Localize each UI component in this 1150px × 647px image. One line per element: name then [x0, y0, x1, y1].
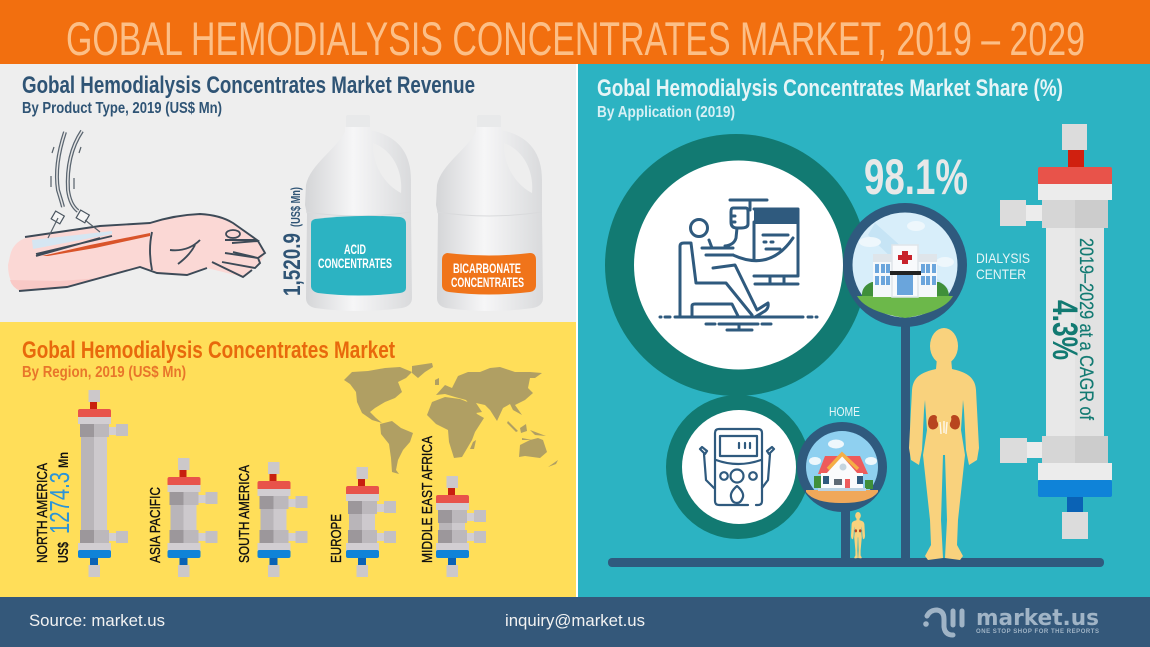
- dialyzer: North America: [78, 390, 128, 577]
- figure: small human body: [851, 512, 865, 558]
- logo: market.us: [923, 606, 1099, 635]
- text: CAGR period: 2019–2029 at a CAGR of: [1075, 238, 1096, 421]
- label: South America: SOUTH AMERICA: [236, 465, 253, 563]
- label: dialysis center: DIALYSIS: [976, 250, 1030, 266]
- label: North America value: 1274.3: [44, 472, 75, 534]
- circle: dialysis patient: [605, 134, 867, 396]
- panel: market by region: [0, 322, 576, 597]
- icon: patient on dialysis: [660, 200, 817, 330]
- label: Middle East Africa: MIDDLE EAST AFRICA: [419, 436, 436, 563]
- source text: Source: market.us: [29, 611, 165, 630]
- bottle: acid concentrates: ACID: [344, 242, 366, 257]
- bottle: bicarbonate concentrates: BICARBONATE: [453, 261, 521, 276]
- panel: revenue by product type: [0, 64, 576, 322]
- bottle: bicarbonate concentrates: [436, 115, 543, 311]
- label: North America value: US$: [55, 542, 72, 563]
- footer bar: [0, 597, 1150, 647]
- value: CAGR: 4.3%: [1045, 300, 1084, 360]
- subheading: product type: By Product Type, 2019 (US$ Mn): [22, 100, 222, 117]
- contact email: inquiry@market.us: [505, 611, 645, 630]
- circle: dialysis center hospital: [843, 203, 967, 327]
- label: North America: NORTH AMERICA: [34, 463, 51, 563]
- bottle: bicarbonate concentrates: CONCENTRATES: [451, 275, 524, 290]
- subheading: region: By Region, 2019 (US$ Mn): [22, 364, 186, 381]
- logo: market.us: market.us: [976, 606, 1099, 631]
- unit: US$ Mn: (US$ Mn): [288, 187, 303, 227]
- world map: [344, 363, 558, 474]
- illustration: forearm with dialysis tubes: [8, 131, 265, 291]
- figure: large human body with kidneys: [909, 328, 979, 560]
- heading: revenue: Gobal Hemodialysis Concentrates Market Revenue: [22, 72, 475, 99]
- dialyzer: South America: [258, 462, 308, 577]
- panel: market share by application: [578, 64, 1150, 597]
- circle: home dialysis machine: [666, 395, 810, 539]
- label: home: HOME: [829, 404, 860, 419]
- circle: home house: [797, 422, 887, 512]
- subheading: application: By Application (2019): [597, 104, 735, 121]
- label: Asia Pacific: ASIA PACIFIC: [147, 487, 164, 563]
- icon: dialysis machine: [700, 429, 774, 505]
- label: dialysis center: CENTER: [976, 266, 1026, 282]
- dialyzer: Middle East Africa: [436, 476, 486, 577]
- logo: market.us: ONE STOP SHOP FOR THE REPORTS: [976, 629, 1099, 635]
- heading: region: Gobal Hemodialysis Concentrates Market: [22, 337, 395, 364]
- label: dialysis center: [976, 250, 1030, 282]
- label: Europe: EUROPE: [328, 514, 345, 563]
- label: North America value: Mn: [55, 452, 71, 468]
- value: acid concentrates revenue: 1,520.9: [279, 233, 306, 296]
- value: 98.1%: 98.1%: [864, 149, 968, 205]
- dialyzer: Europe: [346, 467, 396, 577]
- base and stems: [608, 320, 1104, 567]
- bottle: acid concentrates: CONCENTRATES: [318, 256, 392, 271]
- bottle: acid concentrates: [305, 115, 412, 311]
- dialyzer: Asia Pacific: [168, 458, 218, 577]
- large dialyzer with CAGR: [1000, 124, 1112, 539]
